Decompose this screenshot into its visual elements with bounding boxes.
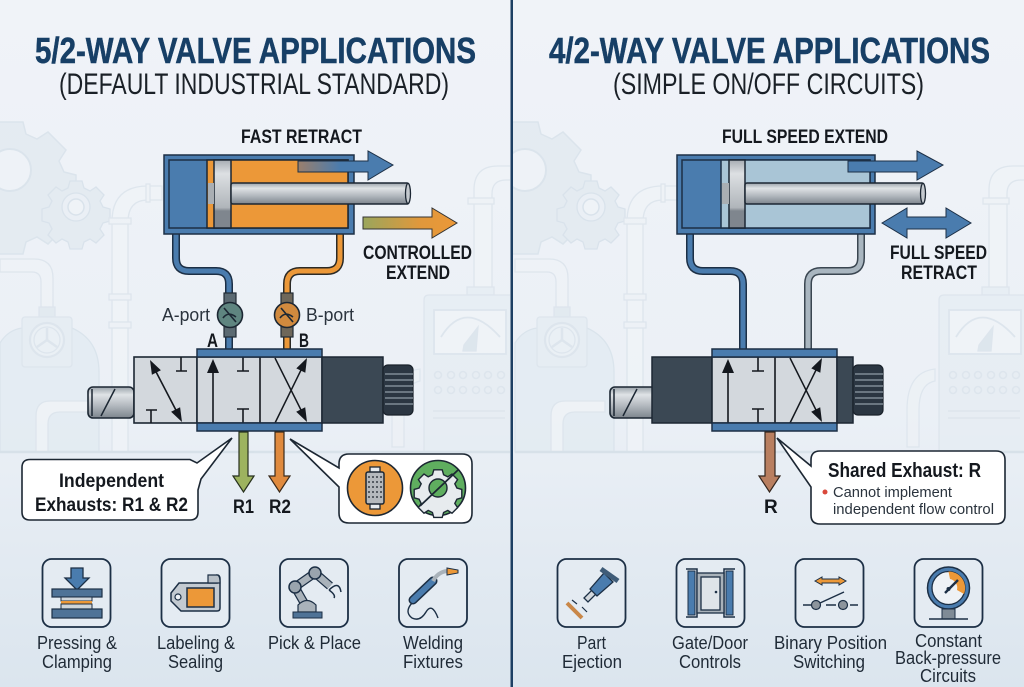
- subtitle: default standard: (DEFAULT INDUSTRIAL STANDARD): [59, 68, 449, 101]
- arrow: full speed extend: [848, 151, 943, 180]
- application: welding fixtures: [399, 559, 467, 672]
- background: left plant line art: [0, 122, 512, 452]
- pipe: B line: [287, 234, 340, 350]
- background: right plant line art: [459, 122, 1024, 452]
- pipe: B line fill: [287, 234, 340, 350]
- panel: right background: [513, 0, 1024, 687]
- label: R2: R2: [269, 497, 291, 518]
- application: part ejection: [558, 559, 626, 672]
- label: controlled extend: EXTEND: [386, 263, 450, 284]
- callout: exhaust flow control icons: [290, 439, 472, 523]
- application: pressing and clamping: Pressing &: [37, 633, 117, 653]
- valve: solenoid knob: [853, 365, 883, 415]
- arrow: fast retract: [298, 151, 393, 180]
- label: controlled extend: [363, 243, 472, 284]
- callout: shared exhaust: Cannot implement: [833, 484, 953, 501]
- application: pick and place: [268, 559, 361, 653]
- cylinder: [164, 155, 410, 234]
- callout: independent exhausts: Exhausts: R1 & R2: [35, 495, 188, 516]
- valve: solenoid knob: [383, 365, 413, 415]
- application: gate and door controls: [672, 559, 748, 672]
- arrow: R2 exhaust: [269, 432, 290, 492]
- label: full speed retract: [890, 243, 987, 284]
- application: pressing and clamping: [37, 559, 117, 672]
- callout: independent exhausts: [22, 438, 232, 520]
- application: labeling and sealing: Labeling &: [157, 633, 235, 653]
- panel: 4/2-way valve: [549, 30, 1005, 686]
- icon: silencer: [348, 460, 402, 516]
- label: A: A: [207, 331, 218, 352]
- valve: center section: [712, 349, 837, 431]
- label: B: B: [299, 331, 309, 352]
- flow control valve: B-port: [274, 293, 300, 337]
- label: full speed extend: FULL SPEED EXTEND: [722, 127, 888, 148]
- arrow: full speed retract: [882, 208, 971, 238]
- application: binary position switching: [774, 559, 887, 672]
- panel: 5/2-way valve: [22, 30, 476, 672]
- panel divider: [510, 0, 513, 687]
- application: labeling and sealing: Sealing: [168, 652, 223, 672]
- icon: no adjustment gear: [410, 460, 466, 517]
- application: welding fixtures: Fixtures: [403, 652, 463, 672]
- panel: left background: [0, 0, 511, 687]
- valve: spool stub: [88, 387, 134, 418]
- application: constant back-pressure circuits: [895, 559, 1001, 686]
- application: binary position switching: Switching: [793, 652, 865, 672]
- application: pick and place: Pick & Place: [268, 633, 361, 653]
- callout: shared exhaust: independent flow control: [833, 501, 994, 518]
- application: welding fixtures: Welding: [403, 633, 463, 653]
- cylinder: [677, 155, 926, 234]
- application: constant back-pressure circuits: Back-pressure: [895, 648, 1001, 668]
- application: part ejection: Part: [577, 633, 606, 653]
- arrow: controlled extend: [363, 208, 457, 238]
- label: R1: R1: [233, 497, 254, 518]
- subtitle: simple circuits: (SIMPLE ON/OFF CIRCUITS): [613, 68, 924, 101]
- pipe: A line fill: [176, 234, 229, 350]
- valve: solenoid body right: [837, 357, 853, 423]
- callout: shared exhaust: Shared Exhaust: R: [828, 460, 981, 482]
- application: binary position switching: Binary Position: [774, 633, 887, 653]
- pipe: grey line fill: [808, 234, 861, 350]
- pipe: A line: [176, 234, 229, 350]
- valve: solenoid body: [322, 357, 383, 423]
- label: A-port: A-port: [162, 305, 210, 325]
- application: gate and door controls: Gate/Door: [672, 633, 748, 653]
- valve: [610, 349, 883, 431]
- label: full speed retract: FULL SPEED: [890, 243, 987, 264]
- application: part ejection: Ejection: [562, 652, 622, 672]
- label: controlled extend: CONTROLLED: [363, 243, 472, 264]
- application: gate and door controls: Controls: [679, 652, 741, 672]
- application: labeling and sealing: [157, 559, 235, 672]
- arrow: R1 exhaust: [233, 432, 254, 492]
- callout: shared exhaust: [777, 438, 1005, 524]
- label: R: R: [764, 497, 778, 518]
- valve: spool stub: [610, 387, 656, 418]
- label: fast retract: FAST RETRACT: [241, 127, 362, 148]
- valve: center section: [197, 349, 322, 431]
- flow control valve: A-port: [218, 293, 242, 337]
- label: full speed retract: RETRACT: [901, 263, 977, 284]
- valve: solenoid body left: [652, 357, 712, 423]
- application: constant back-pressure circuits: Constant: [915, 631, 982, 651]
- callout: independent exhausts: Independent: [59, 471, 165, 492]
- valve: left section: [134, 357, 197, 423]
- label: B-port: B-port: [306, 305, 354, 325]
- valve: [88, 349, 413, 431]
- application: pressing and clamping: Clamping: [42, 652, 112, 672]
- arrow: R exhaust: [759, 432, 780, 492]
- pipe: grey line: [808, 234, 861, 350]
- title: 5/2-way: 5/2-WAY VALVE APPLICATIONS: [35, 30, 476, 71]
- application: constant back-pressure circuits: Circuits: [920, 666, 976, 686]
- pipe: blue line: [690, 234, 743, 350]
- pipe: blue line fill: [690, 234, 743, 350]
